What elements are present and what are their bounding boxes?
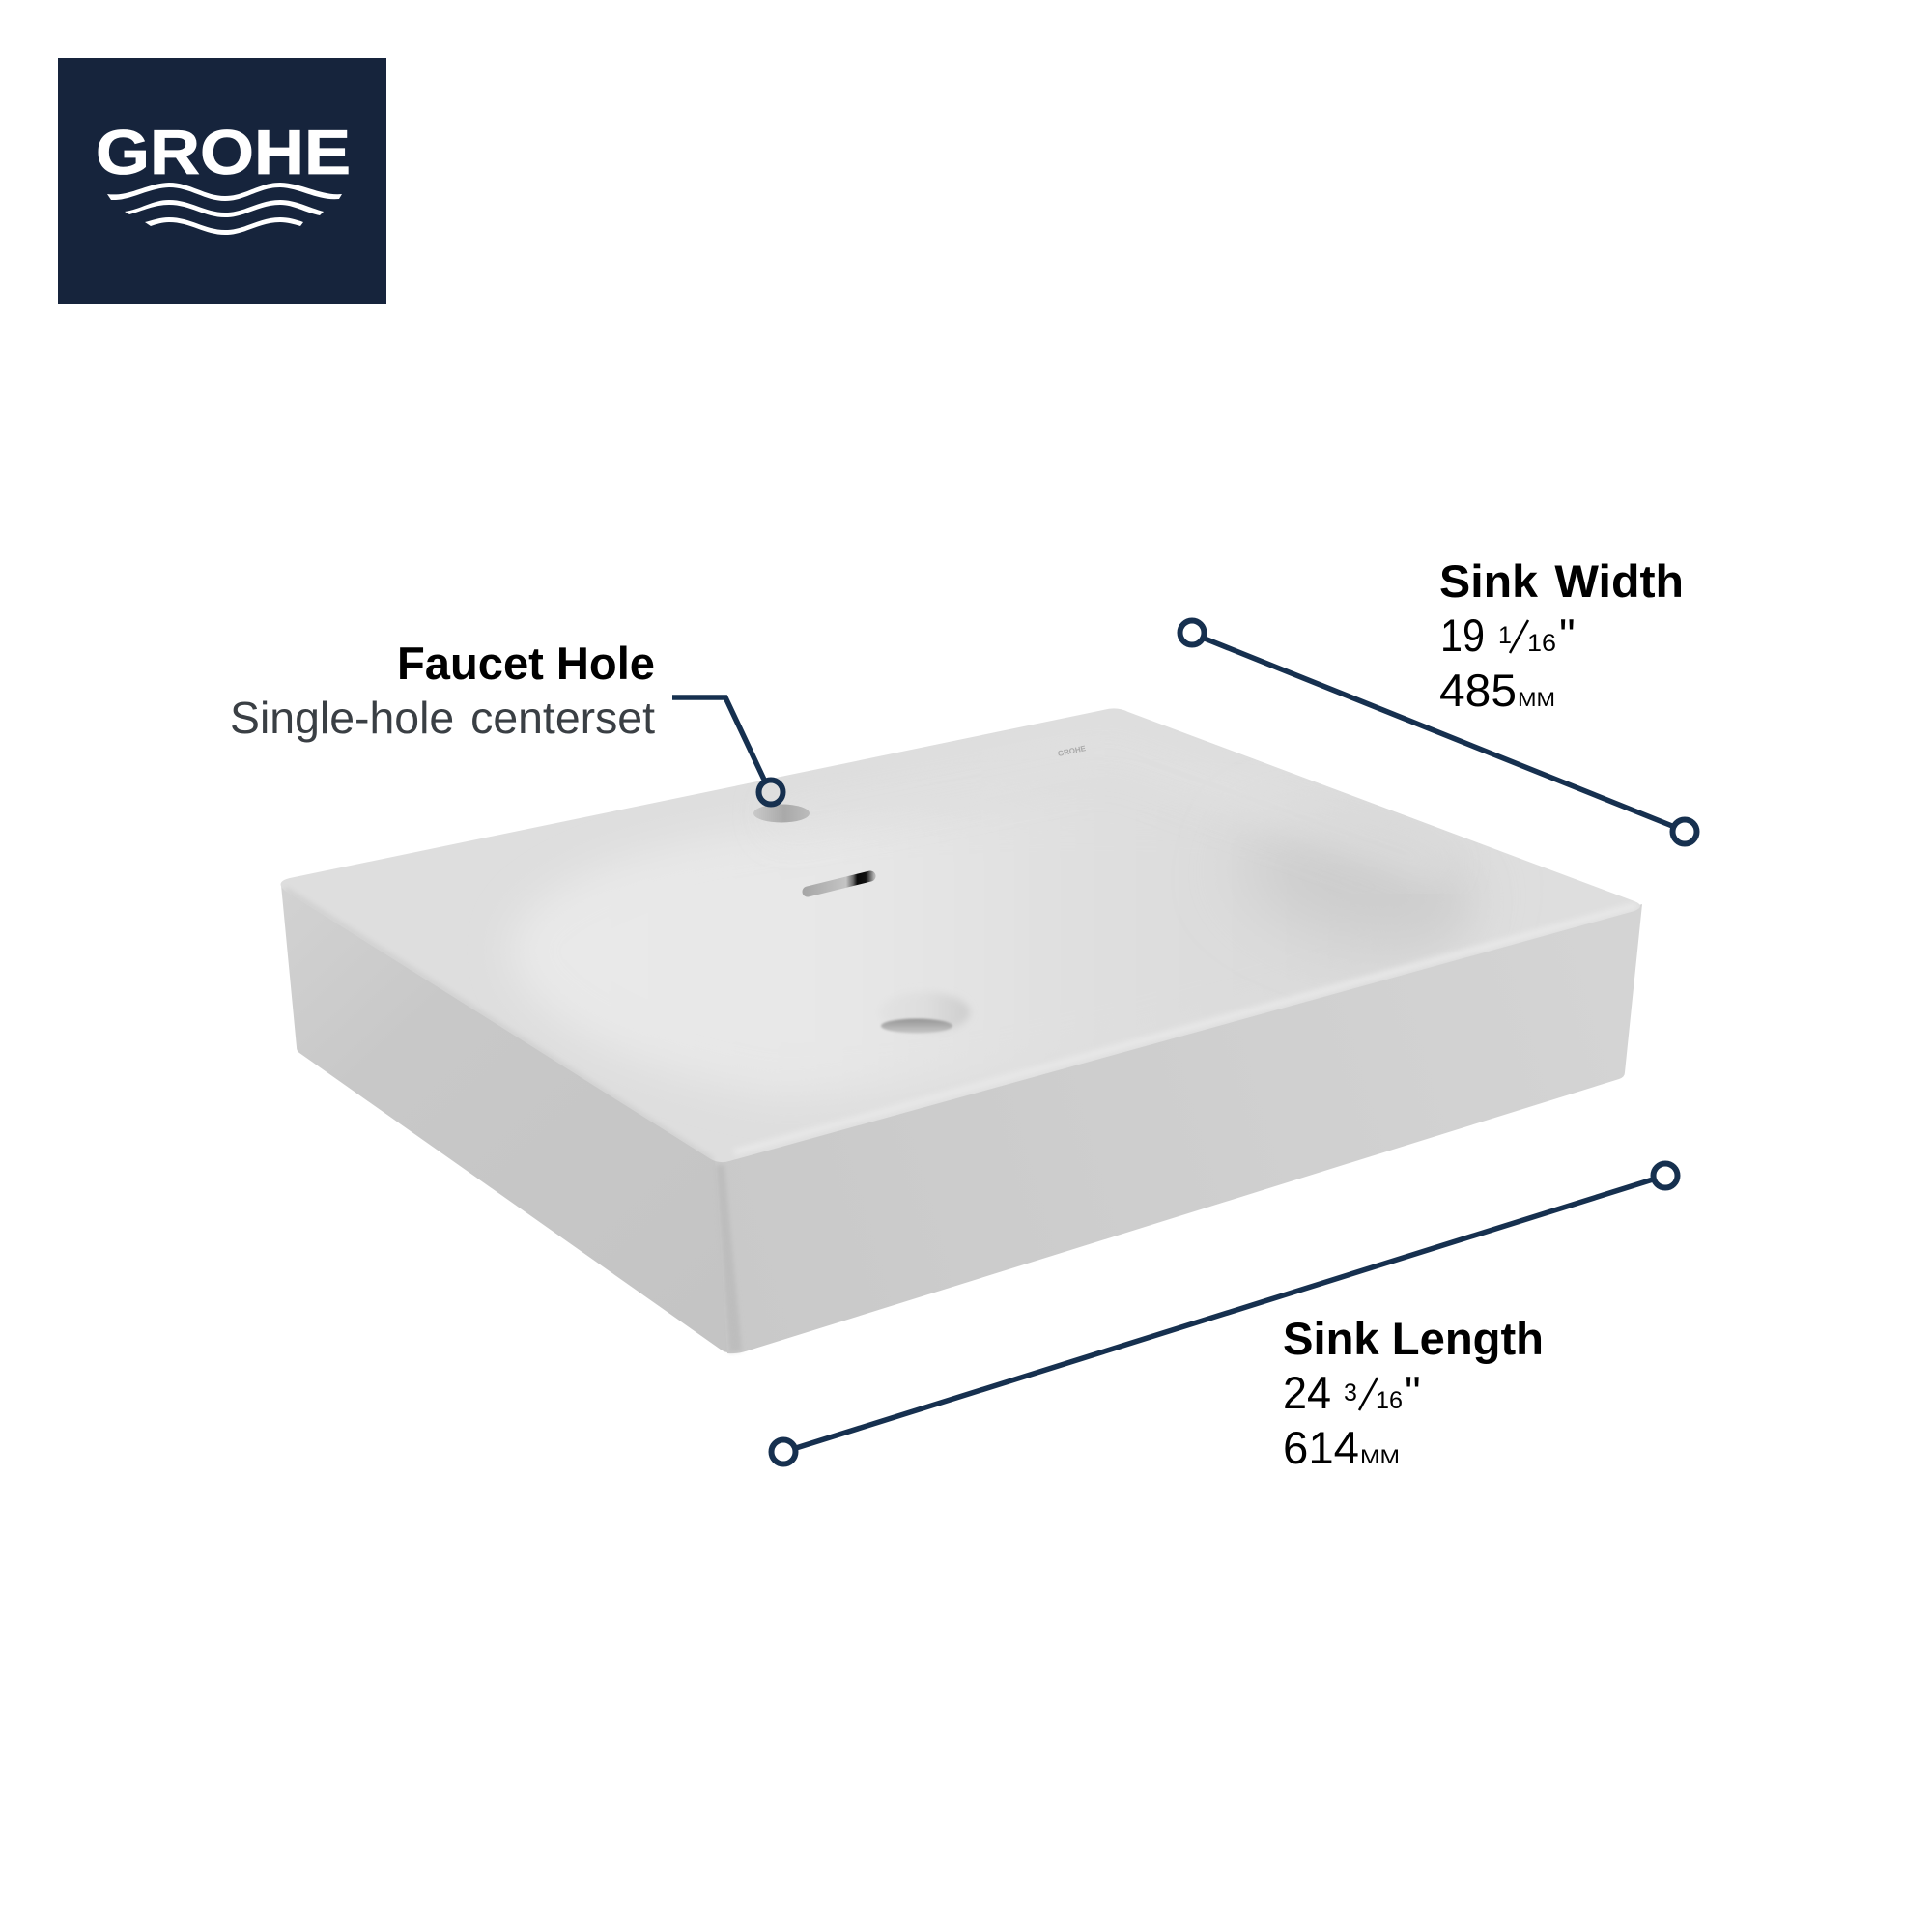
sink width millimetres: MM <box>1518 689 1555 711</box>
sink front rim highlight <box>772 931 1537 1142</box>
sink length dimension line <box>771 1163 1677 1464</box>
sink width dimension line <box>1180 620 1696 844</box>
sink length millimetres: 614 <box>1283 1422 1359 1473</box>
faucet hole <box>753 804 810 823</box>
drain hole <box>881 1018 952 1034</box>
sink illustration <box>270 700 1652 1353</box>
sink width heading: Sink Width <box>1439 555 1684 607</box>
sink length inches: 16 <box>1376 1387 1403 1414</box>
callout: faucet hole <box>230 638 782 804</box>
sink left side face <box>281 885 734 1352</box>
logo waves <box>107 183 342 235</box>
sink length heading: Sink Length <box>1283 1313 1544 1364</box>
sink length inches: 24 <box>1283 1367 1331 1418</box>
sink length inches: 3 <box>1344 1379 1357 1406</box>
sink front corner band <box>716 1165 742 1352</box>
back rim tone <box>773 749 1449 869</box>
sink front side face <box>715 904 1642 1353</box>
sink length millimetres: MM <box>1360 1446 1400 1468</box>
sink width millimetres <box>1439 665 1555 716</box>
sink left rim shade <box>285 890 713 1161</box>
sink width inches: 1 <box>1498 622 1512 649</box>
callout: sink width <box>1180 555 1696 844</box>
basin shaded area <box>1271 846 1416 920</box>
overflow slot <box>808 876 870 892</box>
faucet hole heading: Faucet Hole <box>397 638 655 689</box>
sink width inches: 16 <box>1527 630 1556 657</box>
drain bowl <box>879 992 970 1033</box>
sink width inches <box>1440 610 1576 661</box>
logo wordmark: GROHE <box>96 117 351 187</box>
sink width inches: 19 <box>1440 610 1485 661</box>
sink length inches: " <box>1405 1367 1421 1418</box>
basin shape <box>527 843 863 1075</box>
faucet hole leader line <box>672 697 782 804</box>
callout: sink length <box>771 1163 1677 1473</box>
sink length millimetres <box>1283 1422 1400 1473</box>
sink length inches <box>1283 1367 1421 1418</box>
sink width millimetres: 485 <box>1439 665 1517 716</box>
sink top face with basin <box>270 700 1652 1174</box>
small sink logo: GROHE <box>1057 744 1087 758</box>
sink width inches: " <box>1559 610 1576 661</box>
faucet hole description: Single-hole centerset <box>230 693 655 743</box>
logo: GROHE brand block <box>58 58 386 304</box>
